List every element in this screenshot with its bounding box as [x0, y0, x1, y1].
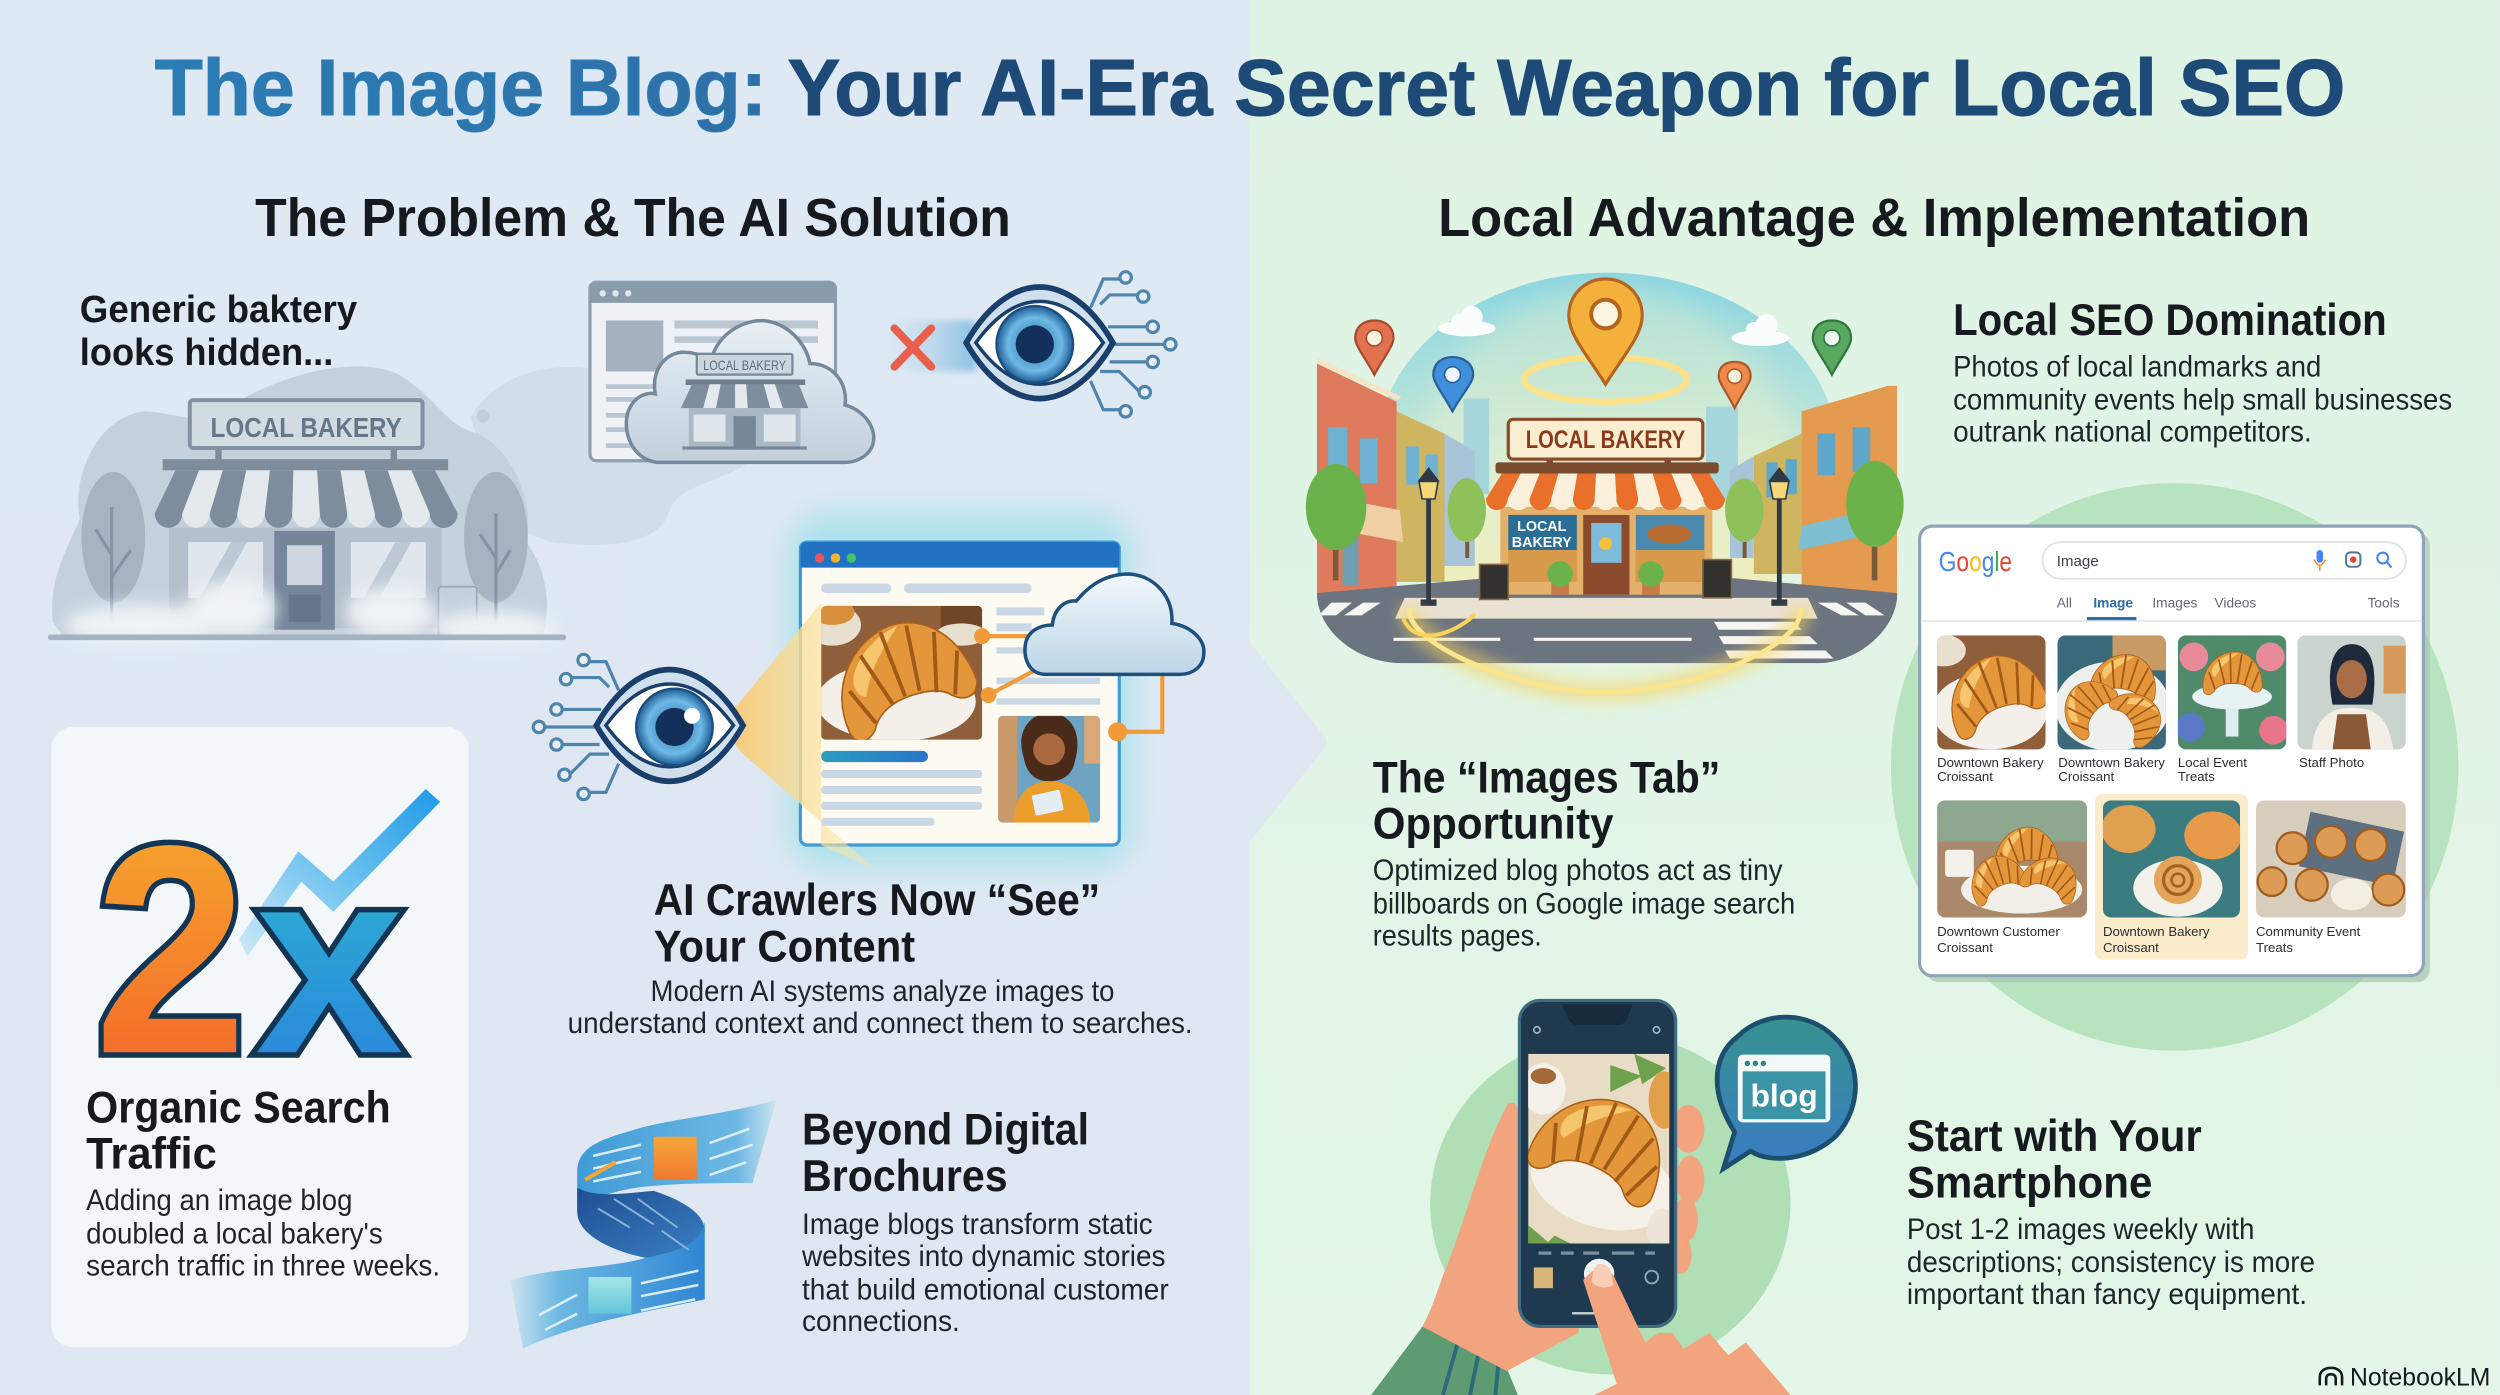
illustration: foggy store: LOCAL BAKERY: [211, 412, 402, 443]
text block: local SEO domination: [1953, 296, 2452, 449]
search tabs: Images: [2152, 595, 2197, 610]
result: downtown bakery croissant: [1921, 635, 2051, 784]
bakery shop: LOCAL BAKERY: [1526, 427, 1686, 454]
text block: start with your smartphone: important than fancy equipment.: [1907, 1278, 2307, 1311]
illustration: AI crawler browser: [789, 513, 1132, 867]
speech bubble: blog: [1717, 1017, 1855, 1169]
result: local event treats: Treats: [2178, 769, 2215, 784]
decorative green circle behind phone: [1430, 1033, 1790, 1374]
text block: beyond digital brochures: [801, 1106, 1169, 1338]
result: bakery croissant plate: [2051, 635, 2171, 784]
result: highlighted downtown bakery croissant: [2095, 794, 2248, 960]
search tabs: Image: [2093, 595, 2133, 610]
result: local event treats: Local Event: [2178, 755, 2247, 770]
heading: right column: Local Advantage & Implementation: [1438, 188, 2310, 248]
text block: beyond digital brochures: that build emotional customer: [802, 1273, 1169, 1306]
bakery shop: [1480, 419, 1731, 599]
result: downtown customer croissant: [1937, 800, 2087, 955]
illustration: digital ribbon: [510, 1100, 776, 1349]
illustration: local street scene: [1306, 273, 1904, 692]
map pin: orange: [1719, 362, 1751, 408]
illustration: hand holding smartphone: [1371, 1000, 1790, 1395]
text block: start with your smartphone: Smartphone: [1907, 1158, 2152, 1207]
result: downtown bakery croissant: Croissant: [1937, 769, 1993, 784]
text block: start with your smartphone: Start with Your: [1907, 1112, 2202, 1161]
map pin: red: [1355, 320, 1393, 375]
icon: AI eye crawling: [533, 654, 743, 800]
text block: images tab opportunity: results pages.: [1373, 919, 1542, 952]
text block: beyond digital brochures: Brochures: [802, 1152, 1008, 1201]
text block: beyond digital brochures: websites into dynamic stories: [801, 1240, 1166, 1273]
search tabs: Tools: [2368, 595, 2400, 610]
text block: AI crawlers: Your Content: [654, 922, 915, 971]
stat heading: Traffic: [86, 1130, 217, 1179]
stat: 2x: [94, 784, 405, 1115]
google logo: Google: [1939, 546, 2012, 577]
map pin: blue: [1433, 357, 1473, 411]
search tabs: Videos: [2215, 595, 2256, 610]
result: community event treats: Community Event: [2256, 924, 2361, 939]
bakery shop: BAKERY: [1512, 535, 1572, 551]
caption: generic bakery: Generic baktery: [80, 288, 358, 331]
search tabs: All: [2057, 595, 2072, 610]
text block: AI crawlers: AI Crawlers Now “See”: [654, 876, 1100, 925]
result: bakery croissant plate: Downtown Bakery: [2058, 755, 2165, 770]
text block: beyond digital brochures: Beyond Digital: [802, 1106, 1089, 1155]
result: bakery croissant plate: Croissant: [2058, 769, 2114, 784]
text block: local SEO domination: Local SEO Domination: [1953, 296, 2387, 345]
result: staff photo: Staff Photo: [2299, 755, 2364, 770]
stat: 2x: x: [255, 813, 405, 1109]
panel: 2x organic search traffic: [51, 727, 469, 1347]
result: community event treats: [2256, 800, 2406, 955]
decorative green circle behind search panel: [1891, 483, 2458, 1051]
stat description: [86, 1184, 440, 1282]
text block: beyond digital brochures: Image blogs transform static: [802, 1208, 1153, 1241]
search box: [2042, 542, 2406, 579]
icon: AI eye blocked: [966, 272, 1176, 417]
stat heading: [86, 1083, 391, 1179]
left hand and sleeve: [1371, 1103, 1704, 1395]
result: staff photo: [2297, 635, 2406, 770]
text block: AI crawlers: understand context and connect them to searches.: [568, 1007, 1193, 1040]
result: community event treats: Treats: [2256, 940, 2293, 955]
result: downtown customer croissant: Downtown Customer: [1937, 924, 2060, 939]
panel: google image search: [1920, 526, 2430, 982]
caption: generic bakery: [80, 288, 358, 374]
stat description: Adding an image blog: [86, 1184, 352, 1217]
stat description: doubled a local bakery's: [86, 1218, 383, 1251]
stat description: search traffic in three weeks.: [86, 1249, 440, 1282]
title: Your AI-Era Secret Weapon for Local SEO: [788, 43, 2345, 132]
text block: images tab opportunity: Opportunity: [1373, 800, 1614, 849]
text block: AI crawlers: [568, 876, 1193, 1040]
illustration: hidden browser and cloud: LOCAL BAKERY: [703, 358, 786, 373]
text block: images tab opportunity: Optimized blog photos act as tiny: [1373, 854, 1783, 887]
map pin: large yellow: [1569, 279, 1642, 384]
result: highlighted downtown bakery croissant: Downtown Bakery: [2103, 924, 2210, 939]
logo: NotebookLM: NotebookLM: [2350, 1364, 2490, 1391]
result: downtown bakery croissant: Downtown Bakery: [1937, 755, 2044, 770]
icon: cloud with connectors: [974, 574, 1204, 741]
illustration: hidden browser and cloud: [590, 282, 874, 462]
text block: AI crawlers: Modern AI systems analyze images to: [651, 975, 1114, 1008]
icon: red cross and blocked trail: [880, 320, 976, 371]
text block: local SEO domination: outrank national competitors.: [1953, 416, 2312, 449]
caption: generic bakery: looks hidden...: [80, 331, 333, 374]
text block: local SEO domination: Photos of local landmarks and: [1953, 350, 2321, 383]
speech bubble: blog: blog: [1750, 1077, 1818, 1113]
result: highlighted downtown bakery croissant: Croissant: [2103, 940, 2159, 955]
text block: images tab opportunity: [1373, 753, 1795, 952]
result: downtown customer croissant: Croissant: [1937, 940, 1993, 955]
tapping hand: [1583, 1268, 1790, 1395]
text block: start with your smartphone: [1907, 1112, 2315, 1311]
heading: left column: The Problem & The AI Solution: [255, 188, 1011, 248]
text block: local SEO domination: community events help small businesses: [1953, 384, 2452, 417]
chart arrow: growth: [239, 789, 440, 957]
text block: start with your smartphone: descriptions; consistency is more: [1907, 1246, 2315, 1279]
map pin: green: [1813, 320, 1851, 375]
search box: Image: [2057, 553, 2099, 570]
stat: 2x: 2: [94, 784, 247, 1115]
text block: images tab opportunity: The “Images Tab”: [1373, 753, 1720, 802]
text block: start with your smartphone: Post 1-2 images weekly with: [1907, 1213, 2254, 1246]
phone: [1519, 1000, 1685, 1326]
illustration: foggy store: [48, 366, 749, 646]
stat heading: Organic Search: [86, 1083, 391, 1132]
search tabs: [1921, 595, 2422, 622]
text block: images tab opportunity: billboards on Google image search: [1373, 888, 1795, 921]
title: The Image Blog:: [155, 43, 767, 132]
result: local event treats: [2176, 635, 2288, 784]
bakery shop: LOCAL: [1517, 519, 1567, 535]
halo ring: [1524, 357, 1687, 402]
text block: beyond digital brochures: connections.: [802, 1305, 960, 1338]
beam from eye to browser: [721, 603, 877, 870]
